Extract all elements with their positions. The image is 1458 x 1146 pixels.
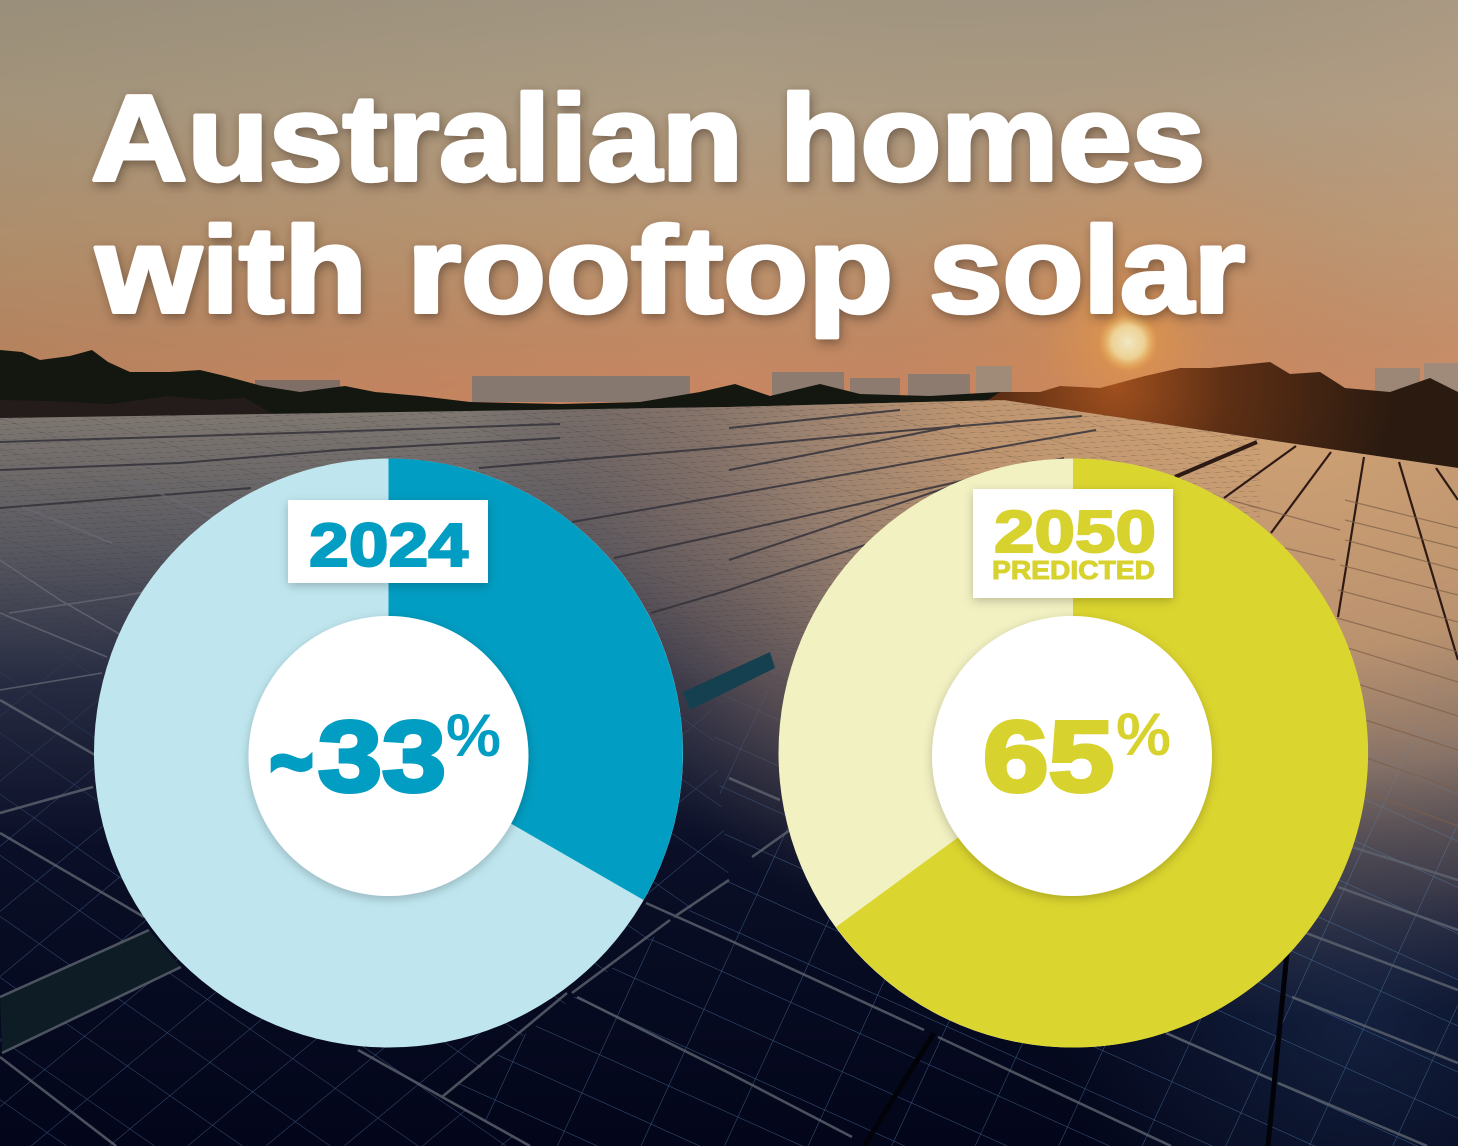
title line 2: solar [929,202,1245,338]
donut remainder: 35% [778,458,1368,1048]
value: 65 percent [983,701,1171,813]
year label card: 2050 [994,499,1156,565]
decorative panel rows [0,410,1096,613]
donut centre circle [248,616,528,896]
title line 1: Australian [91,70,743,206]
donut remainder: 67% [94,458,683,1048]
value: 65 percent: 65 [983,701,1114,813]
year label card: PREDICTED [992,555,1155,585]
background photo: solar panel roof [0,400,1458,1146]
donut segment: 65% [836,458,1368,1047]
title line 1 [91,70,1205,206]
value: about 33 percent: % [446,702,501,769]
year label card [288,500,488,583]
panel: 2050 donut chart [778,458,1368,1048]
value: about 33 percent [270,701,501,813]
background photo: sunset sky [0,0,1458,425]
title line 2: with [95,202,367,338]
title line 2 [95,202,1245,338]
title line 2: rooftop [407,202,893,338]
year label card: 2024 [309,511,468,579]
title [91,70,1245,338]
panel: 2024 donut chart [94,458,683,1048]
decorative right panel columns [1175,442,1458,660]
background photo: skyline and trees [0,350,1458,468]
value: about 33 percent: 33 [318,701,446,813]
title line 1: homes [780,70,1205,206]
year label card [973,489,1173,598]
value: 65 percent: % [1116,701,1171,768]
donut centre circle [932,616,1212,896]
value: about 33 percent: ~ [270,715,313,809]
donut segment: 33% [388,458,683,900]
